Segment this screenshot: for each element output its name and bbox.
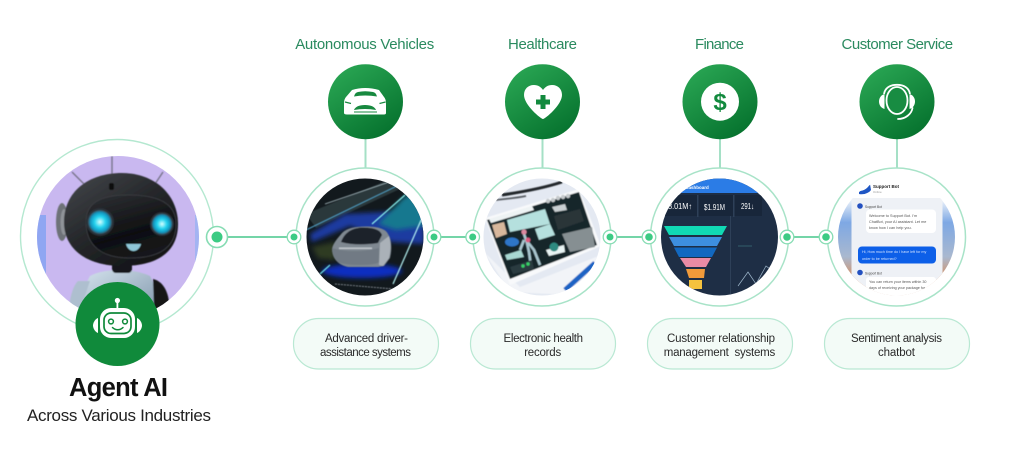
node: left	[466, 230, 480, 244]
agent outer ring	[20, 140, 214, 332]
pill caption: assistance systems	[320, 347, 411, 359]
subtitle: Across Various Industries	[27, 406, 211, 425]
connector lines	[226, 139, 897, 237]
ring with chatbot screen: days of receiving your package for	[869, 286, 926, 290]
title: Agent AI	[69, 374, 168, 402]
icon: car	[328, 64, 403, 139]
node: right	[427, 230, 441, 244]
pill caption	[294, 318, 438, 369]
pill caption: Sentiment analysis	[851, 333, 942, 345]
ring with chatbot screen: Welcome to Support Bot. I'm	[869, 214, 917, 218]
node: right	[603, 230, 617, 244]
panel: finance	[642, 36, 794, 369]
ring with dashboard	[650, 168, 788, 306]
pill caption: Advanced driver-	[325, 333, 408, 345]
pill caption: chatbot	[878, 347, 916, 359]
icon: headset	[860, 64, 934, 139]
ring with chatbot screen: order to be returned?	[862, 257, 897, 261]
ring with chatbot screen: ChatBot, your AI assistant. Let me	[869, 220, 926, 224]
node: left	[287, 230, 301, 244]
pill caption: Electronic health	[504, 333, 583, 345]
heading: Healthcare	[508, 36, 577, 53]
icon: agent robot badge	[76, 282, 160, 366]
ring with dashboard: 291↓	[741, 202, 754, 211]
panel: autonomous vehicles	[287, 36, 441, 369]
ring with chatbot screen: Support Bot	[865, 272, 882, 276]
ring with tablet photo	[473, 168, 611, 306]
panel: healthcare	[466, 36, 617, 369]
pill caption	[470, 318, 616, 369]
ring with chatbot screen: Support Bot	[873, 184, 899, 189]
ring with chatbot screen	[828, 168, 966, 306]
ring with dashboard: 8.01M↑	[668, 202, 692, 211]
heading: Customer Service	[842, 36, 953, 53]
panel: agent AI hub	[20, 140, 214, 332]
pill caption	[648, 318, 792, 369]
pill caption: records	[524, 347, 561, 359]
ring with dashboard: Dashboard	[685, 185, 709, 190]
pill caption: management systems	[664, 347, 776, 359]
node: left	[642, 230, 656, 244]
node: agent output	[206, 226, 228, 248]
heading: Autonomous Vehicles	[295, 36, 434, 53]
heading: Finance	[695, 36, 744, 53]
icon: heart with cross	[505, 64, 580, 139]
pill caption: Customer relationship	[667, 333, 775, 345]
ring with dashboard: $1.91M	[704, 202, 725, 212]
pill caption	[824, 318, 970, 369]
node: right	[780, 230, 794, 244]
ring with chatbot screen: Support Bot	[865, 205, 882, 209]
ring with chatbot screen: Online	[873, 190, 882, 194]
node: left	[819, 230, 833, 244]
icon: dollar coin: $	[713, 89, 727, 116]
ring with chatbot screen: You can return your items within 30	[869, 280, 926, 284]
ring with road photo	[296, 168, 434, 306]
panel: customer service	[819, 36, 970, 369]
ring with chatbot screen: Hi, How much time do I have left for my	[862, 250, 927, 254]
ring with chatbot screen: know how I can help you.	[869, 226, 912, 230]
agent robot illustration	[37, 156, 200, 321]
icon: dollar coin	[682, 64, 758, 139]
